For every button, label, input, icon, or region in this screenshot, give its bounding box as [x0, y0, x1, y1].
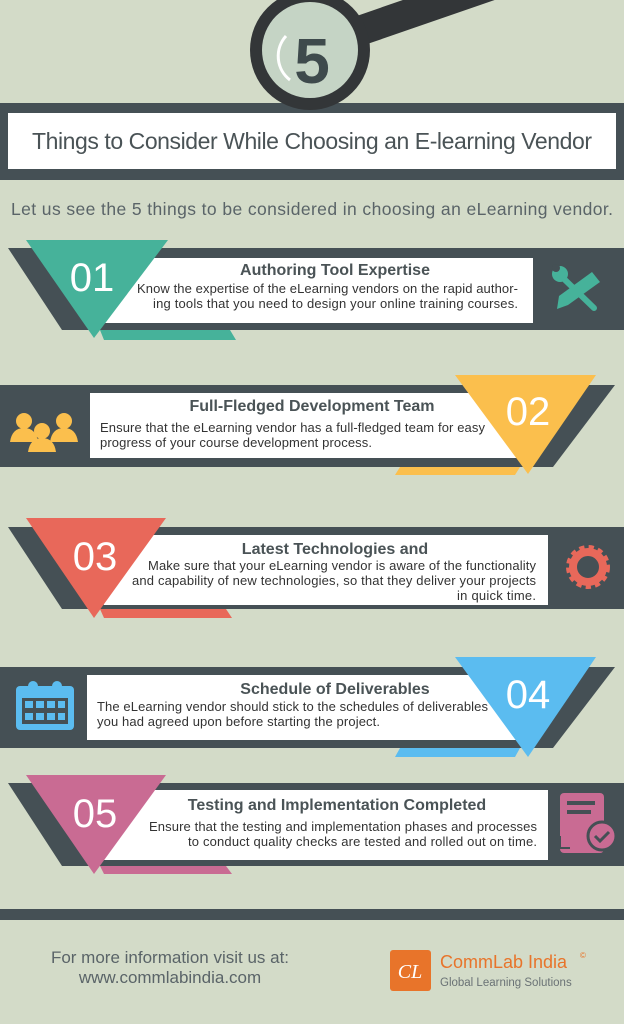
panel: item 04: The eLearning vendor should stick to the schedules of deliverables: [97, 699, 488, 714]
panel: item 04: you had agreed upon before starting the project.: [97, 714, 380, 729]
panel: item 03: and capability of new technologies, so that they deliver your projects: [132, 573, 536, 588]
panel: item 02: 02: [506, 390, 550, 434]
footer text: www.commlabindia.com: [78, 968, 261, 987]
panel: item 01: Authoring Tool Expertise: [240, 262, 430, 279]
header band: [0, 103, 624, 180]
panel: item 01: 01: [70, 256, 114, 300]
panel: item 04: 04: [506, 673, 550, 717]
title: Things to Consider While Choosing an E-learning Vendor: [32, 128, 592, 154]
logo: ©: [580, 951, 586, 960]
panel: item 05: Ensure that the testing and implementation phases and processes: [149, 819, 538, 834]
bottom bar: [0, 909, 624, 920]
panel: item 03: Latest Technologies and: [242, 541, 428, 558]
panel: item 04: Schedule of Deliverables: [240, 681, 430, 698]
panel: item 05: [8, 775, 624, 874]
panel: item 03: 03: [73, 535, 117, 579]
icon: tools: [552, 264, 600, 309]
icon: document check: [560, 793, 616, 853]
logo: Global Learning Solutions: [440, 977, 572, 989]
panel: item 02: [0, 375, 615, 475]
logo: CL: [398, 961, 422, 983]
panel: item 01: ing tools that you need to design your online training courses.: [153, 296, 518, 311]
panel: item 02: Full-Fledged Development Team: [189, 398, 435, 415]
icon: team: [10, 413, 78, 452]
logo: [390, 950, 586, 991]
panel: item 05: to conduct quality checks are tested and rolled out on time.: [188, 834, 537, 849]
panel: item 05: 05: [73, 792, 117, 836]
panel: item 02: Ensure that the eLearning vendor has a full-fledged team for easy: [100, 420, 486, 435]
panel: item 01: Know the expertise of the eLearning vendors on the rapid author-: [137, 281, 518, 296]
icon: gear: [569, 548, 607, 586]
panel: item 04: [0, 657, 615, 757]
icon: magnifier: [250, 0, 495, 110]
panel: item 03: [8, 518, 624, 618]
subtitle: Let us see the 5 things to be considered in choosing an eLearning vendor.: [11, 199, 613, 219]
panel: item 05: Testing and Implementation Completed: [188, 797, 486, 814]
footer text: For more information visit us at:: [51, 948, 289, 967]
footer text: [51, 948, 289, 987]
panel: item 02: progress of your course development process.: [100, 435, 372, 450]
panel: item 03: Make sure that your eLearning vendor is aware of the functionality: [148, 558, 536, 573]
panel: item 01: [8, 240, 624, 340]
icon: calendar: [16, 681, 74, 730]
icon: magnifier: 5: [294, 25, 330, 97]
logo: CommLab India: [440, 952, 568, 972]
panel: item 03: in quick time.: [457, 588, 536, 603]
